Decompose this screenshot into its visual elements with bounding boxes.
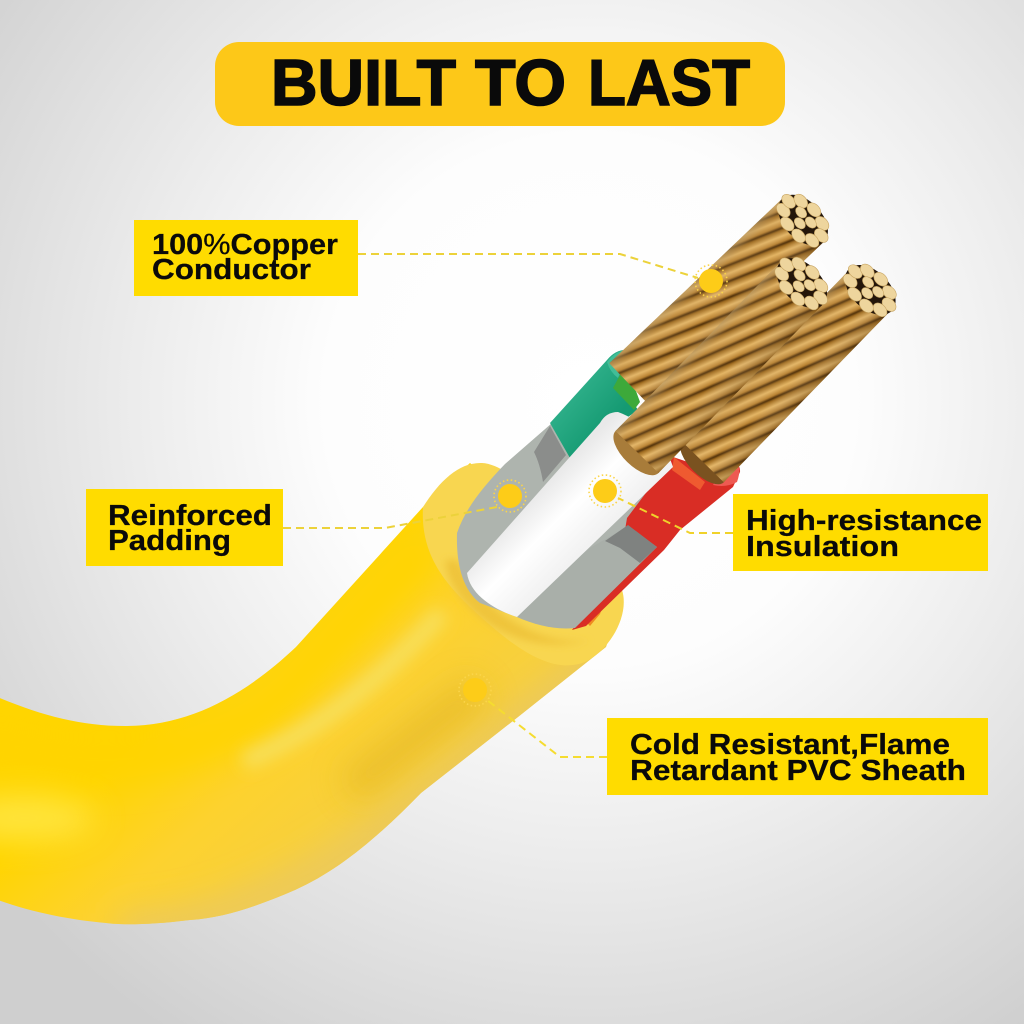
callout: high-resistance insulation: Insulation — [746, 531, 899, 563]
callout: reinforced padding: Padding — [108, 525, 231, 557]
callout: PVC sheath: Cold Resistant,Flame — [630, 729, 950, 761]
callout: PVC sheath: Retardant PVC Sheath — [630, 755, 966, 787]
padding: gray filler — [457, 423, 660, 628]
callout: 100% copper conductor — [134, 220, 727, 297]
callout: reinforced padding: Reinforced — [108, 500, 272, 532]
copper strand: back left — [608, 183, 840, 408]
green insulation core — [550, 350, 638, 458]
callout: 100% copper conductor: Conductor — [152, 254, 311, 286]
title banner: BUILT — [271, 46, 456, 119]
conductor bundle — [457, 350, 740, 630]
callout: PVC sheath — [459, 674, 988, 795]
callout: high-resistance insulation: High-resistance — [746, 505, 982, 537]
white insulation core — [467, 412, 673, 617]
sheath collar — [423, 463, 624, 665]
copper strand: front — [605, 246, 839, 484]
title banner — [215, 42, 785, 126]
padding: gray lower — [517, 526, 657, 628]
title banner: LAST — [588, 46, 750, 119]
yellow PVC sheath — [0, 463, 624, 930]
callout: reinforced padding — [86, 480, 526, 566]
callout: 100% copper conductor: 100%Copper — [152, 229, 338, 261]
padding: dark patch upper — [534, 426, 566, 482]
orange glimpse — [584, 598, 606, 626]
callout: high-resistance insulation — [589, 475, 988, 571]
title banner: TO — [475, 46, 566, 119]
red insulation core — [572, 457, 740, 630]
copper strand: back right — [671, 253, 907, 493]
